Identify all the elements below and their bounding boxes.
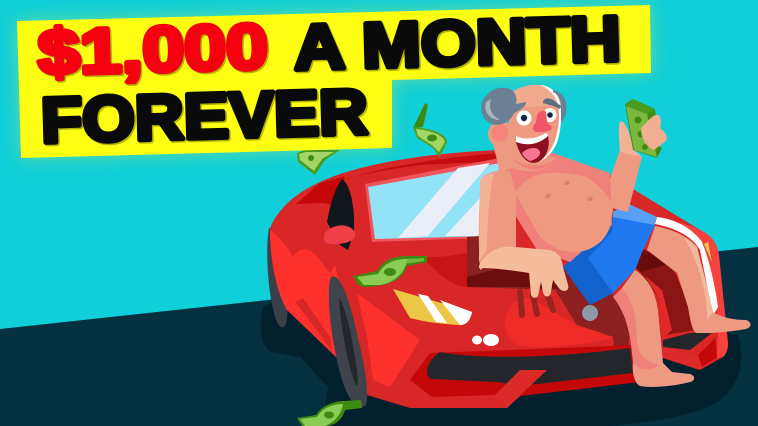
splitter xyxy=(495,370,547,408)
head xyxy=(507,85,560,164)
nose xyxy=(533,111,552,132)
bald top xyxy=(512,85,561,108)
belly xyxy=(515,173,613,252)
A MONTH: A MONTH xyxy=(293,2,622,83)
finger shadows xyxy=(520,292,553,315)
fender white highlight xyxy=(655,217,718,316)
hood highlight xyxy=(505,298,613,347)
money stack xyxy=(625,99,662,158)
windshield frame xyxy=(365,158,510,242)
side bright red trim xyxy=(645,276,672,338)
front leg shade xyxy=(613,288,660,369)
front wheel inner xyxy=(339,298,358,386)
shorts waistband xyxy=(613,203,657,226)
yellow banner shape xyxy=(17,5,651,158)
back leg highlight xyxy=(684,237,713,320)
headlight xyxy=(393,289,472,325)
hair xyxy=(481,88,566,125)
arm on car xyxy=(479,170,568,298)
money note near windshield xyxy=(413,103,447,157)
right corner dark red xyxy=(698,338,717,367)
forearm xyxy=(479,247,568,298)
back leg xyxy=(647,226,750,333)
front wheel xyxy=(329,276,367,407)
tongue xyxy=(522,148,540,161)
right side fender xyxy=(680,222,728,358)
dark band under man's arm xyxy=(467,268,567,289)
rear side bright panel xyxy=(270,230,340,360)
neck xyxy=(492,140,556,172)
front grille surround xyxy=(410,345,640,397)
eyes xyxy=(516,108,556,126)
banner xyxy=(17,2,651,158)
headline shadows: FOREVER xyxy=(41,77,370,158)
engine top dark xyxy=(623,246,668,272)
shaded hood area xyxy=(467,235,633,353)
headlight stripes xyxy=(418,294,472,325)
headline xyxy=(37,2,623,158)
car body xyxy=(270,150,728,408)
man xyxy=(479,85,750,387)
$1,000: $1,000 xyxy=(37,10,269,88)
upper arm light xyxy=(479,174,494,262)
cap on hood xyxy=(582,305,598,321)
mouth xyxy=(516,136,549,163)
raised hand xyxy=(619,121,642,157)
rear wheel xyxy=(267,228,292,328)
front right grille xyxy=(663,333,712,350)
car shadow xyxy=(261,290,741,426)
shorts main xyxy=(563,217,655,305)
fog lights xyxy=(472,334,499,346)
money note on hood xyxy=(353,256,427,287)
raised arm xyxy=(607,150,642,212)
roof dark band xyxy=(296,153,520,205)
car xyxy=(267,150,728,408)
rear arch dark panel xyxy=(296,176,345,205)
ear xyxy=(488,121,514,147)
shorts xyxy=(563,203,657,305)
moustache xyxy=(516,133,548,145)
front right bumper piece xyxy=(663,337,717,370)
upper arm xyxy=(479,170,516,270)
neck shade xyxy=(512,158,556,170)
shorts shaded side xyxy=(563,217,613,267)
fist xyxy=(641,115,667,150)
yellow side light xyxy=(704,242,712,262)
nipples and navel xyxy=(544,180,594,202)
front fender bright panel xyxy=(357,293,420,387)
money note on ground xyxy=(297,400,362,426)
money note top left xyxy=(297,150,340,175)
windshield glass xyxy=(368,163,500,239)
headline shadows: A MONTH xyxy=(294,4,623,85)
head white rim xyxy=(537,85,561,163)
engine dark red panel xyxy=(625,246,695,335)
FOREVER: FOREVER xyxy=(40,75,369,156)
shorts dark panel xyxy=(563,258,613,305)
torso back shading xyxy=(498,153,612,262)
dark ground xyxy=(0,247,758,426)
front grille xyxy=(427,348,633,386)
side air intake xyxy=(327,179,354,250)
front leg xyxy=(622,270,694,387)
headline shadows: $1,000 xyxy=(38,12,270,90)
windshield reflections xyxy=(398,163,490,238)
side mirror xyxy=(324,225,355,244)
hood crease xyxy=(420,253,467,287)
headline shadows xyxy=(38,4,623,158)
side scoop xyxy=(295,298,332,350)
